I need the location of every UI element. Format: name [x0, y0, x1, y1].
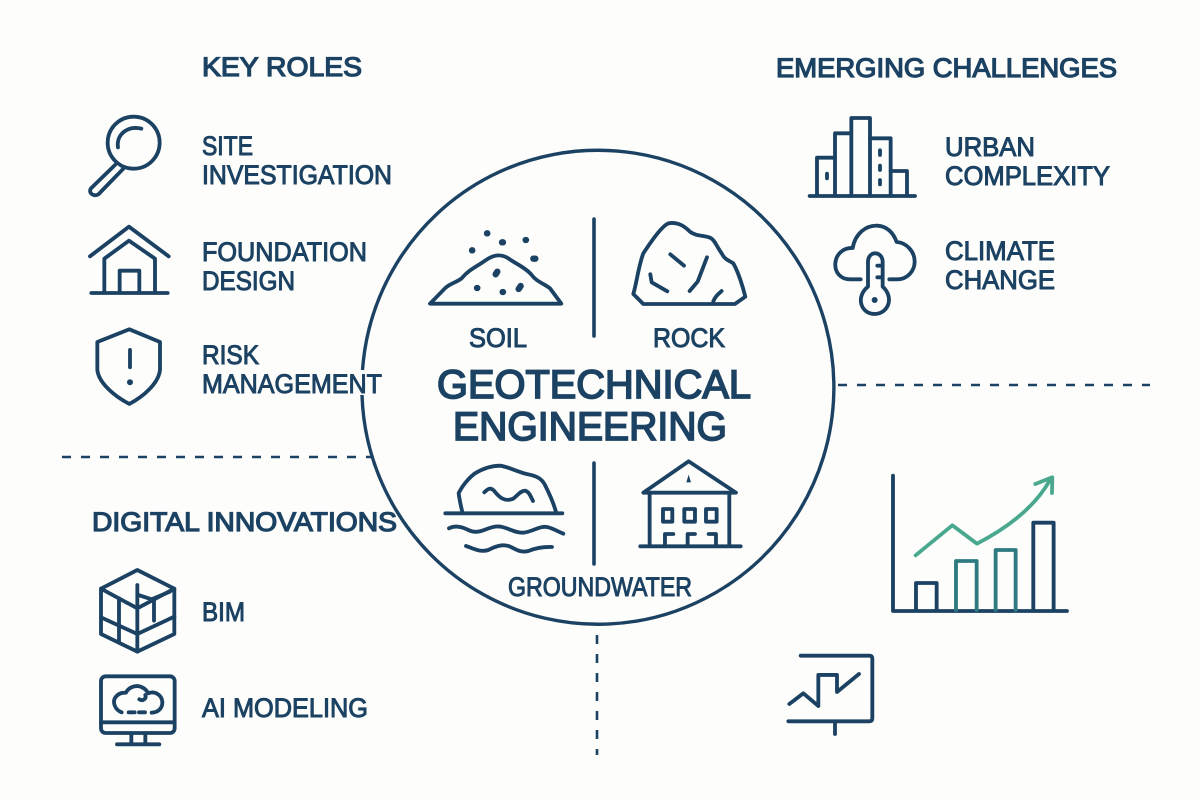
label: risk management: MANAGEMENT: [202, 369, 382, 399]
label: climate change: CHANGE: [945, 265, 1055, 295]
quadrant divider bottom: [592, 463, 596, 564]
label: risk management: RISK: [202, 340, 259, 370]
icon: monitor with cloud: [101, 676, 175, 744]
icon: shield with exclamation: [97, 329, 160, 404]
heading: digital innovations: DIGITAL INNOVATIONS: [92, 507, 397, 537]
chart axes: [893, 476, 1067, 611]
icon: BIM cube: [101, 570, 174, 652]
label: foundation design: FOUNDATION: [202, 237, 367, 267]
chart trend arrow: [916, 477, 1052, 555]
label: site investigation: SITE: [202, 131, 253, 161]
panel: rock icon: [633, 223, 745, 304]
icon: house: [90, 227, 169, 293]
quadrant divider top: [592, 219, 596, 336]
icon: building: [640, 461, 741, 546]
chart: bars and rising trend: [893, 476, 1067, 611]
label: site investigation: INVESTIGATION: [202, 160, 392, 190]
label: site investigation: [202, 131, 392, 190]
label: urban complexity: [945, 132, 1110, 191]
icon: magnifying glass: [90, 117, 160, 195]
label: groundwater: GROUNDWATER: [508, 572, 692, 602]
title: ENGINEERING: [453, 405, 727, 449]
label: foundation design: DESIGN: [202, 266, 295, 296]
panel: soil icon: [430, 233, 561, 304]
icon: cloud with thermometer: [835, 226, 915, 314]
heading: key roles: KEY ROLES: [202, 52, 362, 82]
icon: city buildings: [810, 118, 915, 196]
label: climate change: [945, 236, 1055, 295]
heading: emerging challenges: EMERGING CHALLENGES: [776, 53, 1117, 83]
dashed dividers: [62, 385, 1150, 755]
icon: presentation board: [788, 656, 872, 734]
chart bars: [916, 523, 1054, 610]
label: BIM: BIM: [202, 597, 245, 627]
icon: groundwater: [445, 466, 563, 552]
label: urban complexity: URBAN: [945, 132, 1035, 162]
label: risk management: [202, 340, 382, 399]
label: urban complexity: COMPLEXITY: [945, 161, 1110, 191]
label: foundation design: [202, 237, 367, 296]
central circle: [362, 150, 834, 624]
label: rock: ROCK: [653, 323, 725, 353]
label: soil: SOIL: [469, 323, 527, 353]
label: AI modeling: AI MODELING: [202, 693, 368, 723]
title: GEOTECHNICAL: [437, 363, 751, 407]
title: [437, 363, 751, 449]
label: climate change: CLIMATE: [945, 236, 1055, 266]
